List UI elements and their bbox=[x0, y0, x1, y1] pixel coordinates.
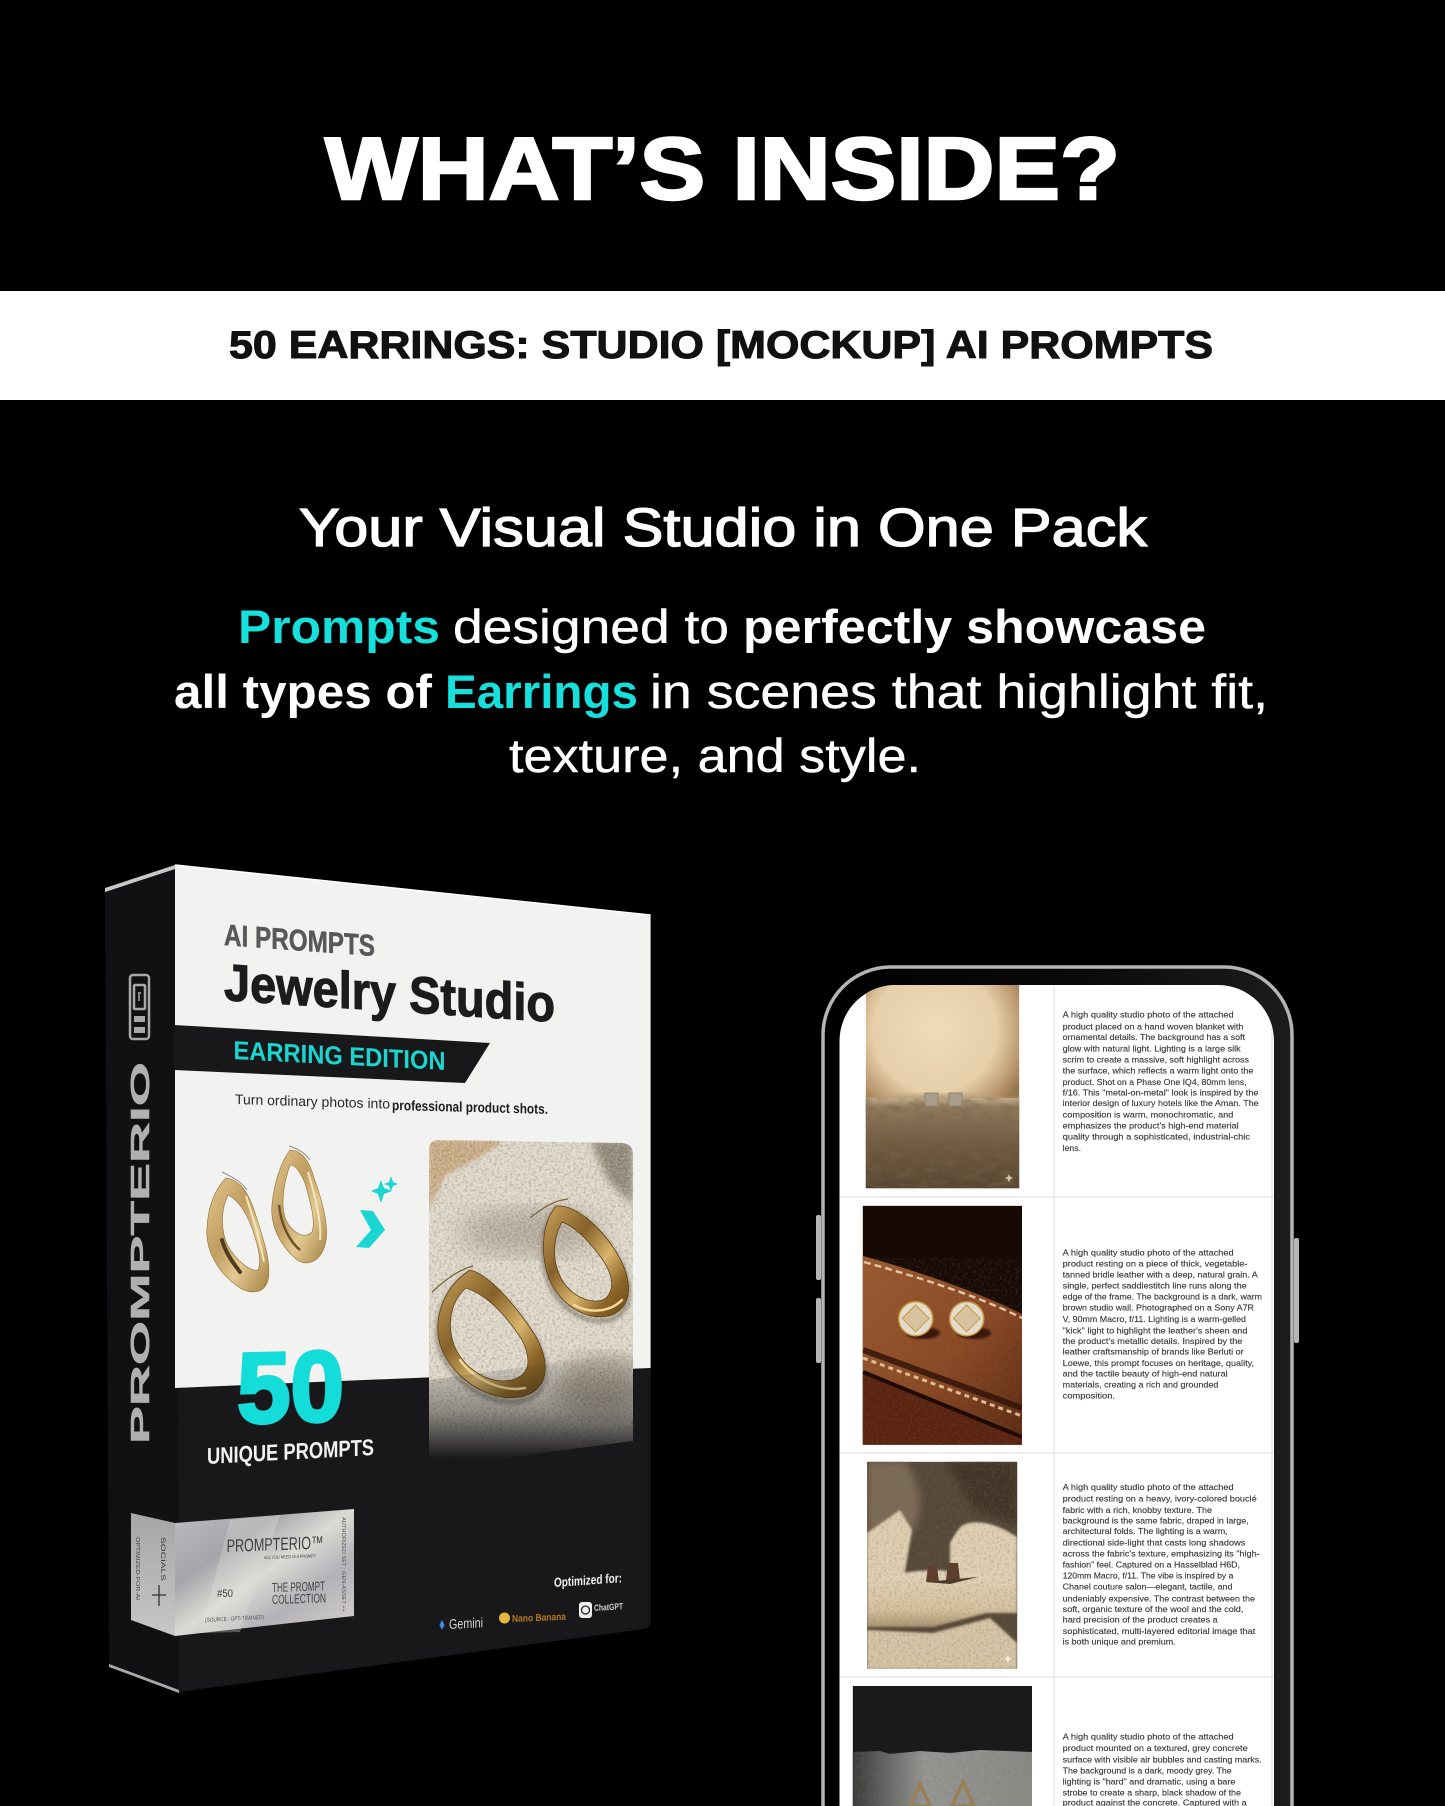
holographic seal: AUTHORIZED SET : GEN-ASSET ++ bbox=[340, 1517, 346, 1612]
row 1 prompt text: interior design of luxury hotels like the Aman. The bbox=[1063, 1098, 1259, 1108]
row 2 prompt text: edge of the frame. The background is a dark, warm bbox=[1063, 1291, 1262, 1301]
title: WHAT’S INSIDE? bbox=[325, 119, 1120, 218]
row 3 photo: boucle fabric bbox=[867, 1461, 1017, 1669]
holographic seal: (SOURCE : GPT-TRAINED) bbox=[205, 1615, 264, 1624]
row 1 prompt text: emphasizes the product's high-end material bbox=[1063, 1120, 1239, 1130]
row 4 prompt text: surface with visible air bubbles and casting marks. bbox=[1063, 1755, 1262, 1765]
sparkle icon bbox=[371, 1176, 398, 1203]
row 2 photo: leather bbox=[863, 1206, 1022, 1445]
holographic seal: COLLECTION bbox=[272, 1590, 326, 1607]
box spine bbox=[105, 865, 179, 1693]
row 3 prompt text: A high quality studio photo of the attached bbox=[1063, 1482, 1234, 1492]
heading: visual studio: Your Visual Studio in One Pack bbox=[299, 498, 1148, 558]
row 3 prompt text: fabric with a rich, knobby texture. The bbox=[1063, 1505, 1212, 1515]
row 2 prompt text: A high quality studio photo of the attached bbox=[1063, 1248, 1234, 1258]
row 3 prompt text: 120mm Macro, f/11. The vibe is inspired by a bbox=[1063, 1570, 1234, 1580]
row 2 prompt text: Loewe, this prompt focuses on heritage, quality, bbox=[1063, 1358, 1254, 1368]
description paragraph: in scenes that highlight fit, bbox=[650, 665, 1268, 718]
row 1 prompt text: composition is warm, monochromatic, and bbox=[1063, 1110, 1234, 1120]
description paragraph: Prompts bbox=[238, 600, 440, 653]
row 2 prompt text: single, perfect saddlestitch line runs along the bbox=[1063, 1281, 1247, 1291]
row 2 prompt text: product resting on a piece of thick, vegetable- bbox=[1063, 1258, 1248, 1268]
holographic seal: SOCIALS bbox=[159, 1537, 166, 1582]
chatgpt logo bbox=[579, 1601, 623, 1618]
row 1 photo: blanket bbox=[866, 985, 1020, 1188]
row 3 prompt text: architectural folds. The lighting is a warm, bbox=[1063, 1526, 1228, 1536]
phone mockup bbox=[816, 967, 1299, 1806]
row 3 prompt text: sophisticated, multi-layered editorial image that bbox=[1063, 1626, 1256, 1636]
row 3 prompt text: product resting on a heavy, ivory-colored bouclé bbox=[1063, 1493, 1257, 1503]
box front bbox=[131, 865, 651, 1692]
product box bbox=[105, 865, 651, 1693]
tagline bbox=[235, 1091, 548, 1117]
holographic seal: PROMPTERIO™ bbox=[227, 1533, 324, 1556]
tagline: Turn ordinary photos into bbox=[235, 1091, 390, 1112]
product name: Jewelry Studio bbox=[224, 954, 555, 1034]
row 4 prompt text: The background is a dark, moody grey. The bbox=[1063, 1765, 1232, 1775]
row 1 prompt text: the surface, which reflects a warm light onto the bbox=[1063, 1065, 1254, 1075]
row 1 prompt text: product placed on a hand woven blanket with bbox=[1063, 1021, 1244, 1031]
row 3 prompt text: directional side-light that casts long shadows bbox=[1063, 1538, 1245, 1548]
row 1 prompt text: glow with natural light. Lighting is a large silk bbox=[1063, 1043, 1241, 1053]
row 2 prompt text: and the tactile beauty of high-end natural bbox=[1063, 1369, 1228, 1379]
row 1 prompt text: f/16. This "metal-on-metal" look is inspired by the bbox=[1063, 1087, 1259, 1097]
phone body bbox=[823, 967, 1292, 1806]
table lines bbox=[839, 985, 1274, 1806]
subtitle band text: 50 EARRINGS: STUDIO [MOCKUP] AI PROMPTS bbox=[229, 324, 1213, 367]
edition banner: EARRING EDITION bbox=[234, 1035, 446, 1076]
row 4 prompt text bbox=[1063, 1732, 1262, 1806]
row 3 prompt text bbox=[1063, 1482, 1260, 1647]
row 1 prompt text: ornamental details. The background has a soft bbox=[1063, 1032, 1246, 1042]
row 3 prompt text: hard precision of the product creates a bbox=[1063, 1615, 1218, 1625]
row 3 prompt text: background is the same fabric, draped in large, bbox=[1063, 1515, 1249, 1525]
row 2 prompt text: leather craftsmanship of brands like Berluti or bbox=[1063, 1347, 1244, 1357]
description paragraph: designed to bbox=[453, 600, 729, 653]
row 2 earrings bbox=[899, 1302, 991, 1339]
optimized for row bbox=[440, 1570, 623, 1632]
nano banana logo bbox=[499, 1612, 566, 1625]
row 1 prompt text: scrim to create a massive, soft highlight across bbox=[1063, 1055, 1249, 1065]
row 1 prompt text bbox=[1063, 1010, 1259, 1153]
arrow icon bbox=[356, 1210, 385, 1248]
row 2 prompt text: brown studio wall. Photographed on a Sony A7R bbox=[1063, 1303, 1254, 1313]
phone screen bbox=[839, 985, 1274, 1806]
gemini logo bbox=[440, 1614, 483, 1632]
description paragraph bbox=[174, 600, 1268, 782]
AI prompts label: AI PROMPTS bbox=[224, 919, 375, 963]
holographic seal bbox=[131, 1509, 354, 1636]
description paragraph: all types of bbox=[174, 665, 432, 718]
row 3 prompt text: is both unique and premium. bbox=[1063, 1637, 1176, 1647]
row 4 earrings bbox=[910, 1782, 974, 1806]
earrings product cutout bbox=[207, 1146, 327, 1292]
50 count: 50 bbox=[237, 1330, 344, 1445]
row 3 prompt text: across the fabric's texture, emphasizing its "high- bbox=[1063, 1548, 1260, 1558]
unique prompts caption: UNIQUE PROMPTS bbox=[207, 1434, 374, 1469]
optimized for row: Optimized for: bbox=[554, 1570, 622, 1590]
row 2 prompt text: "kick" light to highlight the leather's sheen and bbox=[1063, 1325, 1248, 1335]
row 3 prompt text: undeniably expensive. The contrast between the bbox=[1063, 1593, 1255, 1603]
chatgpt logo: ChatGPT bbox=[594, 1601, 623, 1613]
spine brand name: PROMPTERIO bbox=[125, 1062, 155, 1444]
row 1 prompt text: A high quality studio photo of the attached bbox=[1063, 1010, 1234, 1020]
row 4 prompt text: lighting is "hard" and dramatic, using a bare bbox=[1063, 1777, 1236, 1787]
edition banner bbox=[174, 1025, 490, 1083]
row 3 prompt text: Chanel couture salon—elegant, tactile, and bbox=[1063, 1582, 1233, 1592]
row 1 prompt text: product. Shot on a Phase One IQ4, 80mm lens, bbox=[1063, 1077, 1247, 1087]
row 1 earrings bbox=[925, 1093, 962, 1106]
spine logo icon bbox=[130, 975, 149, 1039]
row 2 prompt text: composition. bbox=[1063, 1391, 1115, 1401]
row 3 prompt text: soft, organic texture of the wool and the cold, bbox=[1063, 1604, 1243, 1614]
row 4 prompt text: product mounted on a textured, grey concrete bbox=[1063, 1743, 1248, 1753]
row 2 prompt text: the product's metallic details. Inspired by the bbox=[1063, 1336, 1243, 1346]
row 2 prompt text: V, 90mm Macro, f/11. Lighting is a warm-gelled bbox=[1063, 1314, 1246, 1324]
row 3 earrings bbox=[926, 1563, 978, 1584]
description paragraph: Earrings bbox=[445, 665, 638, 718]
description paragraph: texture, and style. bbox=[509, 729, 921, 782]
phone side buttons bbox=[816, 1215, 1299, 1363]
holographic seal: #50 bbox=[217, 1588, 233, 1600]
row 4 prompt text: A high quality studio photo of the attached bbox=[1063, 1732, 1234, 1742]
sand photo earrings bbox=[438, 1210, 629, 1402]
description paragraph: perfectly showcase bbox=[743, 600, 1206, 653]
holographic seal: ALL YOU NEED IS A PROMPT bbox=[264, 1553, 316, 1560]
nano banana logo: Nano Banana bbox=[512, 1612, 566, 1625]
row 2 prompt text: tanned bridle leather with a deep, natural grain. A bbox=[1063, 1270, 1258, 1280]
tagline: professional product shots. bbox=[392, 1097, 548, 1117]
subtitle band bbox=[0, 291, 1445, 400]
row 4 photo: concrete bbox=[853, 1686, 1032, 1806]
gemini logo: Gemini bbox=[449, 1614, 483, 1632]
row 1 prompt text: quality through a sophisticated, industrial-chic bbox=[1063, 1132, 1251, 1142]
row 3 prompt text: fashion" feel. Captured on a Hasselblad H6D, bbox=[1063, 1560, 1240, 1570]
row 2 prompt text bbox=[1063, 1248, 1262, 1401]
row 2 prompt text: materials, creating a rich and grounded bbox=[1063, 1379, 1219, 1389]
row 1 prompt text: lens. bbox=[1063, 1143, 1081, 1153]
holographic seal: THE PROMPT bbox=[272, 1578, 325, 1595]
holographic seal: OPTIMIZED-FOR-AI bbox=[134, 1537, 140, 1600]
sand photo bbox=[429, 1140, 633, 1456]
row 4 prompt text: strobe to create a sharp, black shadow of the bbox=[1063, 1787, 1241, 1797]
